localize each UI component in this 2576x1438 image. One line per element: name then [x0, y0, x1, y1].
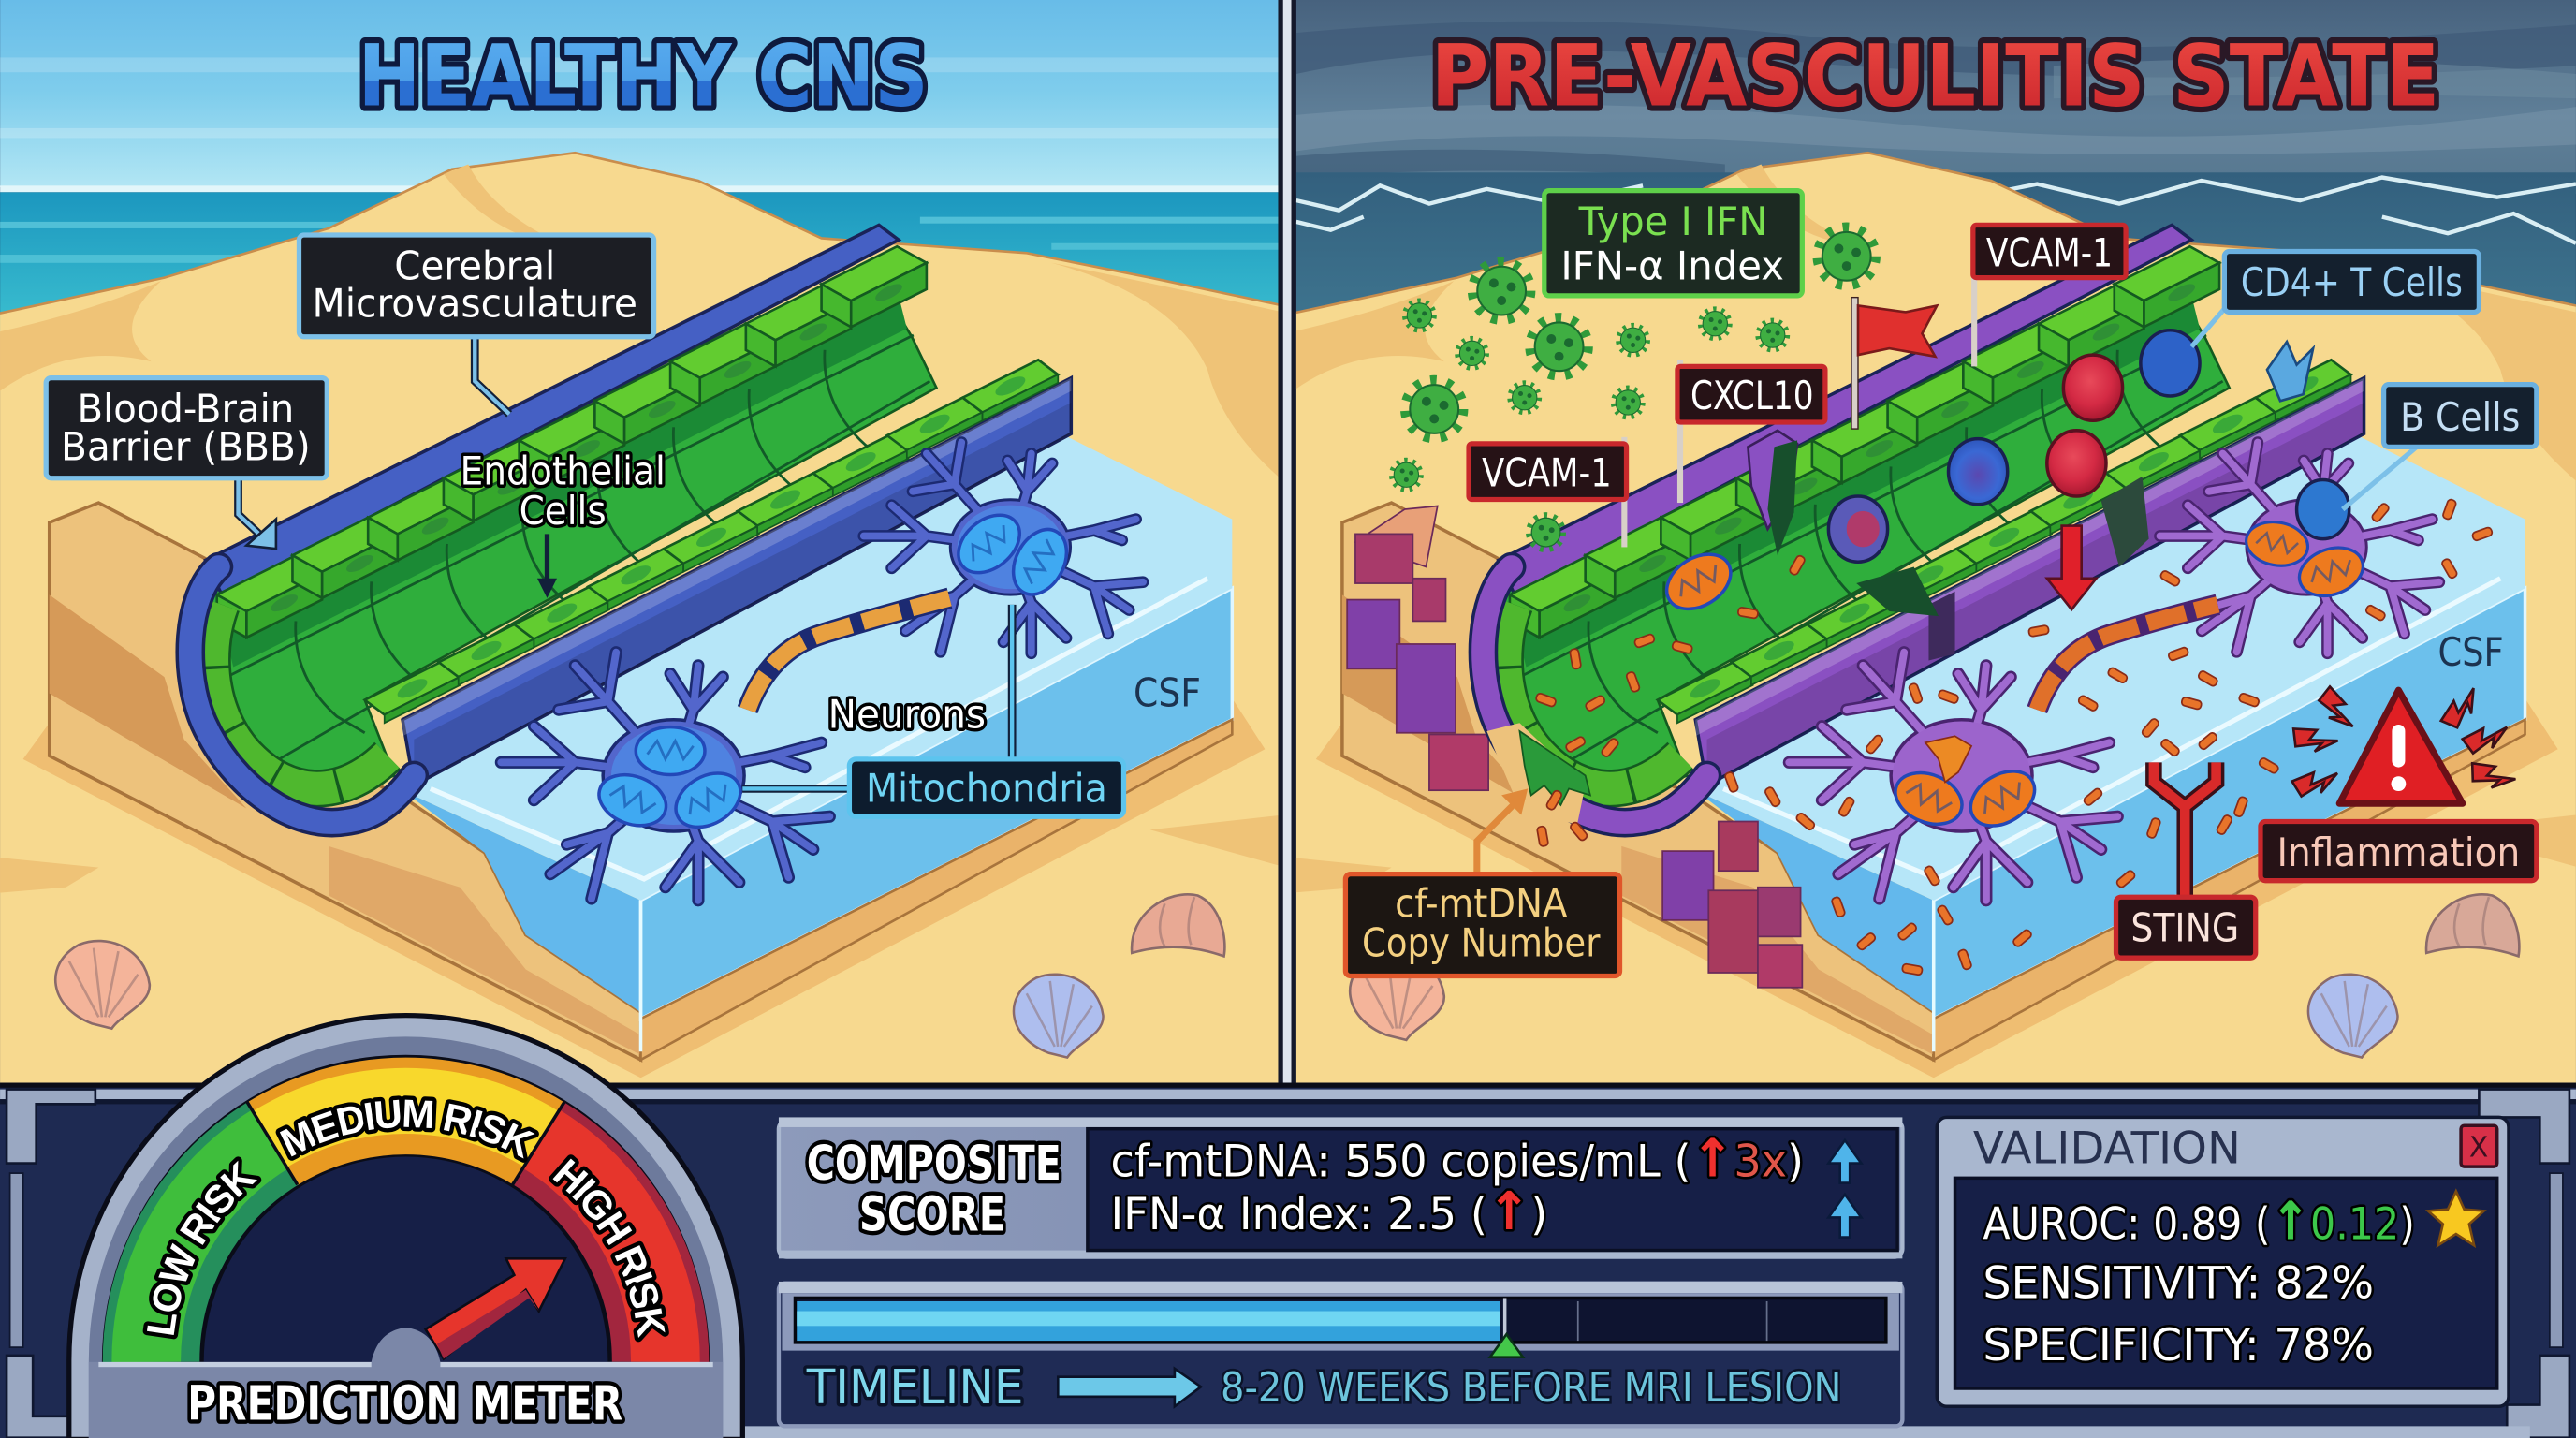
label: blood-brain barrier: Barrier (BBB) — [61, 423, 311, 469]
label: blood-brain barrier: Blood-Brain — [78, 386, 294, 432]
prediction meter gauge — [66, 1013, 745, 1438]
damaged block bricks — [1347, 506, 1802, 988]
risk labels: HIGH RISK — [549, 1154, 669, 1343]
panel: healthy CNS — [0, 0, 1314, 1093]
label: STING — [2116, 897, 2256, 958]
isometric tissue block with CSF — [23, 437, 1265, 1078]
prediction meter label: PREDICTION METER — [187, 1376, 622, 1431]
stormy sea — [1295, 172, 2576, 311]
composite score heading — [807, 1137, 1061, 1243]
label: Type I IFN — [1544, 191, 1802, 296]
label: Type I IFN: IFN-α Index — [1560, 242, 1784, 288]
label: VCAM-1 lower — [1469, 437, 1627, 547]
panel: timeline — [779, 1282, 1902, 1426]
red infiltration arrow — [2047, 526, 2096, 609]
beach sand — [0, 153, 1314, 1093]
cf-mtDNA value: cf-mtDNA: 550 copies/mL (↑3x) — [1110, 1129, 1804, 1190]
label: endothelial cells: Cells — [520, 488, 607, 534]
segment: high risk — [539, 1139, 666, 1362]
sky background — [0, 0, 1280, 187]
label: VCAM-1 lower: VCAM-1 — [1482, 449, 1612, 495]
mitochondria: damaged orange — [1657, 518, 2370, 837]
label: VCAM-1 upper: VCAM-1 — [1986, 229, 2113, 275]
neuron: right damaged — [2159, 443, 2439, 653]
IFN-alpha value: IFN-α Index: 2.5 (↑) — [1110, 1181, 1547, 1242]
blood vessel tube cross-section — [190, 225, 1071, 823]
panel: pre-vasculitis state — [1260, 0, 2576, 1093]
timeline value: 8-20 WEEKS BEFORE MRI LESION — [1221, 1364, 1841, 1412]
label: cerebral microvasculature: Microvasculature — [313, 281, 637, 327]
cf-mtDNA debris — [1535, 499, 2493, 976]
label: STING: STING — [2130, 905, 2239, 951]
label: CXCL10: CXCL10 — [1690, 373, 1814, 418]
risk labels: LOW RISK — [142, 1156, 262, 1339]
needle — [426, 1258, 565, 1358]
sea — [0, 185, 1280, 333]
icon: blue up arrows — [1828, 1140, 1862, 1238]
validation heading: VALIDATION — [1973, 1123, 2241, 1175]
risk labels: MEDIUM RISK — [275, 1095, 539, 1163]
shells — [55, 894, 1224, 1058]
metal housing — [69, 1016, 742, 1438]
label: Type I IFN: Type I IFN — [1578, 198, 1767, 244]
label: B cells — [2343, 385, 2537, 509]
label: B cells: B Cells — [2400, 394, 2520, 440]
label: neurons: Neurons — [828, 691, 986, 737]
label: endothelial cells — [460, 448, 666, 598]
label: mitochondria — [742, 605, 1123, 816]
panel divider — [1278, 0, 1296, 1088]
vessel wall breaches — [1486, 431, 2149, 825]
label: endothelial cells: Endothelial — [460, 448, 666, 494]
red flag — [1852, 298, 1937, 429]
title: healthy CNS: HEALTHY CNS — [359, 25, 929, 125]
label: CSF inflamed: CSF — [2438, 629, 2504, 675]
tissue block with CSF — [1316, 437, 2558, 1078]
label: cf-mtDNA copy number — [1345, 788, 1620, 976]
label: cerebral microvasculature — [299, 235, 654, 414]
close button: X — [2469, 1132, 2488, 1165]
beach sand — [1260, 153, 2576, 1093]
label: CD4+ T cells — [2191, 252, 2479, 346]
segment: medium risk — [271, 1101, 542, 1143]
timeline label: TIMELINE — [806, 1360, 1023, 1416]
panel: composite score — [779, 1117, 1902, 1258]
panel: validation — [1937, 1117, 2509, 1406]
label: cerebral microvasculature: Cerebral — [394, 242, 555, 288]
stormy sky — [1296, 0, 2576, 194]
label: CD4+ T cells: CD4+ T Cells — [2241, 259, 2463, 305]
label: CSF healthy: CSF — [1134, 670, 1201, 716]
sensitivity: SENSITIVITY: 82% — [1983, 1257, 2374, 1309]
lightning bolts — [2290, 684, 2517, 798]
arrow — [1058, 1369, 1201, 1406]
specificity: SPECIFICITY: 78% — [1983, 1320, 2374, 1372]
close button — [2461, 1125, 2497, 1167]
label: blood-brain barrier — [46, 378, 327, 549]
icon: star — [2428, 1191, 2484, 1245]
immune cells: T cells and B cells — [1828, 330, 2349, 562]
mitochondria: healthy — [592, 504, 1077, 838]
label: CXCL10 — [1677, 360, 1825, 503]
composite score heading: COMPOSITE — [807, 1137, 1061, 1192]
marker — [1490, 1334, 1523, 1357]
base plate — [89, 1328, 723, 1438]
shells — [1350, 894, 2519, 1058]
label: inflammation: Inflammation — [2277, 829, 2520, 875]
axon with myelin — [748, 598, 949, 710]
warning triangle — [2339, 690, 2463, 803]
composite score heading: SCORE — [859, 1188, 1005, 1243]
crystal cluster on the vessel — [2267, 342, 2313, 401]
neuron: left — [501, 653, 829, 901]
label: cf-mtDNA copy number: cf-mtDNA — [1395, 880, 1568, 926]
interferon virus particles — [1393, 229, 1874, 549]
title: pre-vasculitis state: PRE-VASCULITIS STATE — [1431, 25, 2439, 125]
panel: bottom dashboard — [0, 1083, 2576, 1438]
fragmented mitochondrion — [1925, 736, 1971, 782]
risk labels — [142, 1095, 669, 1343]
neuron: left damaged — [1789, 653, 2117, 901]
segment: low risk — [146, 1139, 272, 1362]
damaged axon — [2037, 605, 2217, 710]
label: cf-mtDNA copy number: Copy Number — [1362, 919, 1601, 965]
label: mitochondria: Mitochondria — [866, 765, 1107, 811]
STING receptor — [2154, 762, 2217, 897]
damaged blood vessel — [1483, 225, 2364, 823]
label: VCAM-1 upper — [1971, 225, 2126, 366]
neuron: right — [864, 443, 1143, 653]
progress bar — [795, 1298, 1886, 1343]
AUROC: AUROC: 0.89 (↑0.12) — [1983, 1191, 2415, 1252]
